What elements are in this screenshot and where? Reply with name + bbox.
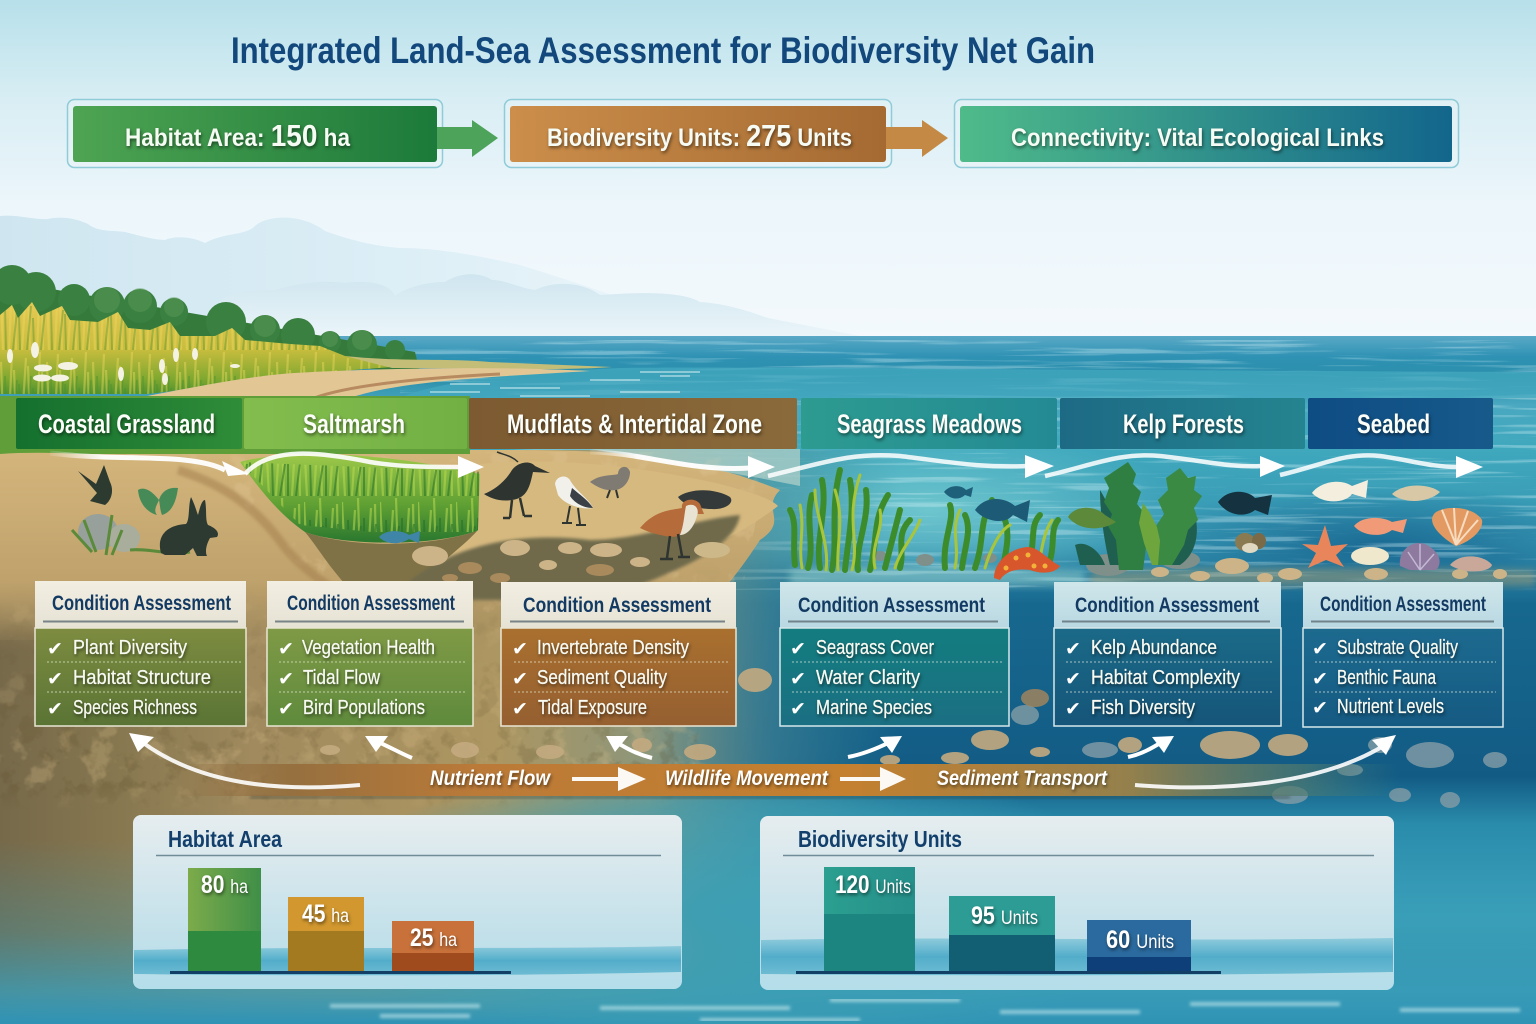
- shell: pale pink: [1450, 556, 1492, 571]
- background: bottom ripples: [330, 1000, 1520, 1020]
- label: wildlife movement: Wildlife Movement: [665, 767, 829, 790]
- seagrass meadow: [790, 470, 1058, 570]
- checklist: ✔: [47, 638, 63, 660]
- panel title: Habitat Area: [168, 826, 282, 852]
- card body: [1303, 628, 1503, 727]
- icon: rocks: [78, 514, 140, 552]
- fish: pale: [1312, 480, 1368, 501]
- background: seabed sand strip: [1090, 568, 1536, 586]
- card body: [780, 628, 1009, 726]
- bar: 25 ha: [392, 921, 474, 973]
- arrow: to saltmarsh: [365, 736, 412, 758]
- bar: 80 ha: 80 ha: [201, 871, 248, 899]
- shell: fan top: [1392, 486, 1440, 501]
- header: seagrass meadows: Seagrass Meadows: [837, 409, 1022, 439]
- checklist: Vegetation Health: [302, 637, 435, 659]
- card: seagrass: [780, 582, 1009, 726]
- card title: Condition Assessment: [523, 594, 711, 617]
- background: water streaks upper: [400, 340, 1536, 590]
- shell: purple: [1400, 543, 1440, 570]
- checklist: Species Richness: [73, 697, 197, 719]
- icon: crab: [678, 490, 731, 509]
- background: light shallows: [670, 430, 1190, 590]
- checklist: ✔: [1065, 698, 1081, 720]
- checklist: ✔: [1312, 697, 1328, 719]
- background: deep seabed shade: [1140, 485, 1536, 605]
- checklist: [512, 637, 728, 720]
- card body: [1054, 628, 1281, 726]
- background: dry grass strip: [345, 356, 612, 369]
- checklist: ✔: [512, 668, 528, 690]
- checklist: Sediment Quality: [537, 667, 667, 689]
- card header: [35, 581, 246, 628]
- KPI: biodiversity units: [504, 100, 892, 168]
- bar: 60 units: [1087, 920, 1191, 973]
- bar: 95 units: 95 Units: [971, 902, 1038, 930]
- card: saltmarsh: [267, 581, 473, 726]
- arrow: biodiversity to connectivity: [886, 120, 948, 157]
- bar chart: habitat area: [170, 868, 511, 973]
- fish: dark blue: [975, 499, 1030, 522]
- icon: rabbit silhouette: [160, 497, 218, 556]
- grass tuft: [72, 515, 190, 555]
- KPI: habitat area: Habitat Area: 150 ha: [125, 118, 351, 153]
- checklist: Seagrass Cover: [816, 637, 934, 659]
- arrow: wildlife to sediment: [840, 767, 906, 791]
- KPI: habitat area: [68, 100, 442, 168]
- header: seagrass meadows: [801, 398, 1057, 449]
- bar: 60 units: 60 Units: [1106, 926, 1174, 954]
- checklist: ✔: [1312, 668, 1328, 690]
- process flow band: [170, 764, 1400, 796]
- header: saltmarsh: Saltmarsh: [303, 409, 405, 439]
- checklist: [278, 637, 467, 720]
- bar: 120 units: 120 Units: [835, 871, 911, 899]
- checklist: ✔: [1065, 668, 1081, 690]
- bar: 25 ha: 25 ha: [410, 924, 457, 952]
- checklist: Habitat Complexity: [1091, 667, 1240, 689]
- KPI: connectivity: Connectivity: Vital Ecological Links: [1011, 124, 1384, 152]
- habitat flow arrows: [50, 452, 1483, 478]
- checklist: ✔: [278, 668, 294, 690]
- background: lower land: [0, 450, 900, 1024]
- grass flowers: [7, 342, 240, 385]
- header: mudflats: Mudflats & Intertidal Zone: [507, 409, 762, 439]
- panel water: [134, 946, 681, 975]
- icon: mud rock: [694, 542, 730, 558]
- card: coastal grassland: [35, 581, 246, 726]
- checklist: [1065, 637, 1274, 720]
- shell: coral: [1351, 547, 1389, 565]
- header: seabed: Seabed: [1357, 409, 1430, 439]
- background: sky: [0, 0, 1536, 340]
- icon: bird silhouette: [78, 465, 112, 505]
- checklist: [1312, 637, 1496, 719]
- checklist: ✔: [1065, 638, 1081, 660]
- checklist: Tidal Flow: [303, 667, 380, 689]
- card title: Condition Assessment: [798, 594, 985, 617]
- checklist: ✔: [790, 638, 806, 660]
- checklist: Plant Diversity: [73, 637, 187, 659]
- fish: small dark: [944, 486, 973, 499]
- checklist: [47, 637, 241, 720]
- arrow: habitat to biodiversity: [437, 120, 498, 157]
- checklist: Water Clarity: [816, 667, 920, 689]
- background: sea: [0, 336, 1536, 1024]
- checklist: ✔: [47, 668, 63, 690]
- checklist: Invertebrate Density: [537, 637, 689, 659]
- background: sandy ground: [0, 450, 780, 650]
- background: beach edge: [314, 374, 500, 398]
- card header: [1054, 582, 1281, 628]
- background: shallow water near beach: [400, 367, 1536, 398]
- header: seabed: [1308, 398, 1493, 449]
- background: grass strip under headers: [0, 396, 470, 454]
- checklist: ✔: [790, 668, 806, 690]
- arrow: to mudflats: [606, 736, 652, 758]
- card body: [501, 628, 736, 726]
- mussels: [1235, 533, 1266, 553]
- checklist: ✔: [47, 698, 63, 720]
- card body: [35, 628, 246, 726]
- background: pebbles: [320, 540, 1507, 808]
- card: mudflats: [501, 582, 736, 726]
- checklist: Tidal Exposure: [538, 697, 647, 719]
- checklist: Kelp Abundance: [1091, 637, 1217, 659]
- background: sparkles near shore: [430, 372, 700, 396]
- background: saltmarsh: [240, 454, 480, 581]
- panel title: Biodiversity Units: [798, 826, 962, 852]
- bar: 45 ha: 45 ha: [302, 900, 349, 928]
- header: kelp forests: [1060, 398, 1305, 449]
- icon: starfish: [1302, 525, 1348, 568]
- background: distant misty hills: [0, 216, 720, 330]
- fish: pink: [1354, 518, 1407, 535]
- card: seabed: [1303, 582, 1503, 727]
- background: mudflat sand: [400, 461, 778, 600]
- icon: shorebird 3: [590, 467, 630, 498]
- icon: butterfly: [138, 488, 178, 515]
- label: nutrient flow: Nutrient Flow: [430, 767, 551, 790]
- background: hill edge: [178, 470, 365, 610]
- shell: scallop: [1432, 508, 1482, 546]
- background: lower sea fade: [0, 840, 1536, 1024]
- background: front misty hills: [217, 274, 860, 336]
- card title: Condition Assessment: [287, 592, 455, 615]
- background: sand hill: [0, 453, 370, 640]
- icon: saltmarsh fish: [379, 531, 420, 543]
- bar: 80 ha: [188, 868, 261, 973]
- bar: 45 ha: [288, 897, 364, 973]
- card title: Condition Assessment: [52, 592, 231, 615]
- header: coastal grassland: [16, 398, 242, 449]
- band shadow: [250, 795, 1290, 799]
- arrow: to seagrass: [848, 736, 902, 757]
- background: light mottling: [0, 452, 770, 810]
- checklist: Nutrient Levels: [1337, 696, 1444, 718]
- icon: shorebird 1: [484, 452, 550, 518]
- checklist: [790, 637, 1002, 720]
- checklist: ✔: [790, 698, 806, 720]
- checklist: ✔: [1312, 638, 1328, 660]
- bar: 120 units: [824, 867, 915, 973]
- header: saltmarsh: [244, 398, 467, 449]
- checklist: ✔: [278, 638, 294, 660]
- checklist: Habitat Structure: [73, 667, 211, 689]
- chart panel: habitat area: [133, 815, 682, 989]
- curved arrow: to seabed: [1135, 735, 1396, 787]
- kelp: [1075, 462, 1202, 570]
- background: pale water above mudflat: [590, 449, 800, 486]
- coral creature: [994, 547, 1060, 580]
- bar chart: biodiversity units: [796, 867, 1221, 973]
- background: tree line: [0, 265, 420, 372]
- header: mudflats: [469, 398, 797, 449]
- checklist: ✔: [512, 638, 528, 660]
- fish: black: [1218, 492, 1272, 515]
- background: upper grassland: [0, 300, 400, 396]
- background: beach: [147, 368, 590, 398]
- card header: [501, 582, 736, 628]
- header: kelp forests: Kelp Forests: [1123, 409, 1244, 439]
- background: dark mottling: [0, 560, 740, 810]
- card body: [267, 628, 473, 726]
- chart panel: biodiversity units: [760, 816, 1394, 990]
- label: sediment transport: Sediment Transport: [937, 767, 1108, 790]
- title: Integrated Land-Sea Assessment for Biodiversity Net Gain: [231, 30, 1095, 71]
- panel water: [761, 938, 1393, 975]
- checklist: ✔: [512, 698, 528, 720]
- checklist: Marine Species: [816, 697, 932, 719]
- header: coastal grassland: Coastal Grassland: [38, 409, 215, 439]
- icon: plover: [640, 500, 704, 559]
- card header: [267, 581, 473, 628]
- KPI: biodiversity units: Biodiversity Units: 275 Units: [547, 118, 852, 153]
- card: kelp forests: [1054, 582, 1281, 726]
- checklist: Substrate Quality: [1337, 637, 1458, 659]
- arrow: nutrient to wildlife: [572, 767, 646, 791]
- checklist: Fish Diversity: [1091, 697, 1195, 719]
- background: seagrass sand strip: [790, 567, 1085, 586]
- card header: [1303, 582, 1503, 628]
- checklist: Bird Populations: [303, 697, 425, 719]
- curved arrow: to coastal grassland: [129, 733, 360, 787]
- arrow: to kelp: [1128, 736, 1174, 757]
- bar: 95 units: [949, 896, 1055, 973]
- checklist: Benthic Fauna: [1337, 667, 1437, 689]
- background: middle teal glow: [300, 760, 1160, 1024]
- checklist: ✔: [278, 698, 294, 720]
- fish: green: [1068, 508, 1116, 528]
- icon: shorebird 2: [555, 477, 593, 525]
- card header: [780, 582, 1009, 628]
- card title: Condition Assessment: [1075, 594, 1259, 617]
- KPI: connectivity: [954, 100, 1458, 168]
